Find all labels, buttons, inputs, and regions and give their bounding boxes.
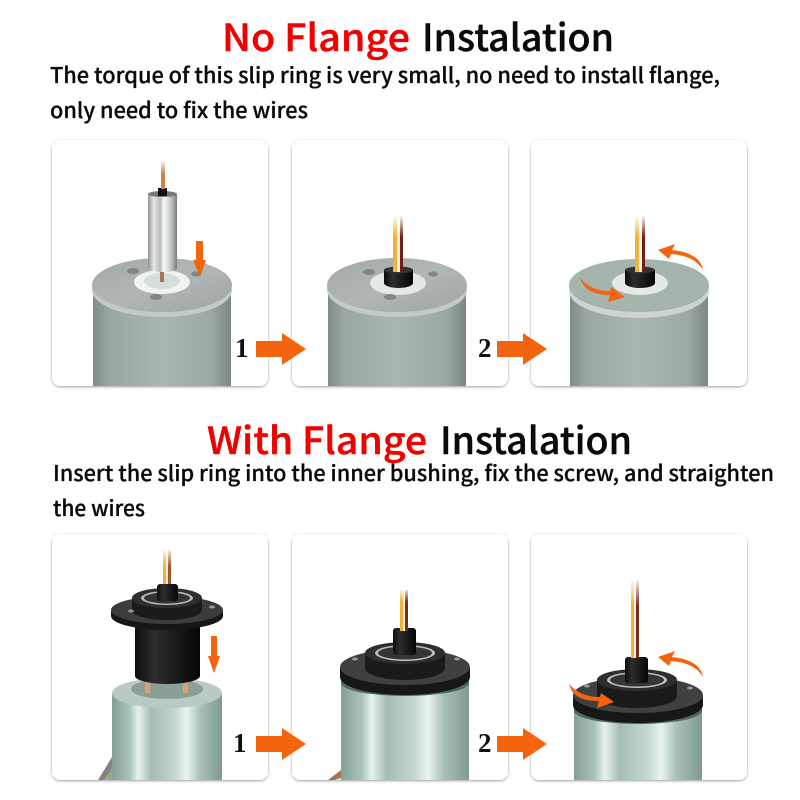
motor body <box>341 676 469 780</box>
panel: no flange step 1 <box>52 140 268 386</box>
colored motor wires <box>98 757 112 780</box>
slip ring and wires <box>384 215 413 288</box>
title: no flange installation <box>222 8 614 62</box>
text block: no flange description <box>50 59 720 125</box>
panel: no flange step 2 <box>292 140 508 386</box>
slip ring and wires <box>625 215 655 288</box>
icon: down arrow <box>193 241 206 277</box>
panel: no flange step 3 <box>531 140 747 386</box>
arrow: no flange step 1 to 2 <box>256 333 306 365</box>
icon: rotate arrow upper <box>658 244 703 270</box>
icon: down arrow <box>208 636 220 673</box>
panel: with flange step 1 <box>52 534 268 780</box>
step number 1: 1 <box>235 333 248 363</box>
title: with flange installation: Instalation <box>440 411 632 465</box>
motor body <box>327 258 467 386</box>
motor body <box>574 704 702 780</box>
panel: with flange step 3 <box>531 534 747 780</box>
icon: rotate arrow upper <box>658 651 703 677</box>
panel: with flange step 2 <box>292 534 508 780</box>
title: no flange installation: Instalation <box>422 8 614 62</box>
step number 1: 1 <box>233 728 246 758</box>
step number 2: 2 <box>478 728 492 758</box>
text block: no flange description: The torque of this slip ring is very small, no need to install flange, <box>50 59 720 90</box>
title: with flange installation <box>207 411 632 465</box>
motor body <box>112 678 222 780</box>
black flange slip ring <box>111 548 223 684</box>
title: no flange installation: No Flange <box>222 8 410 62</box>
step number 2: 2 <box>478 333 492 363</box>
brown motor wire <box>328 770 341 780</box>
icon: rotate arrow lower <box>580 278 625 302</box>
text block: no flange description: only need to fix the wires <box>50 94 308 125</box>
motor body <box>92 258 232 386</box>
black flange slip ring <box>340 588 470 695</box>
text block: with flange description: Insert the slip ring into the inner bushing, fix the screw, and straighten <box>53 457 774 488</box>
text block: with flange description <box>53 457 774 523</box>
icon: rotate arrow lower <box>569 684 614 708</box>
title: with flange installation: With Flange <box>207 411 427 465</box>
motor body <box>569 259 709 386</box>
arrow: no flange step 2 to 3 <box>497 333 547 365</box>
black flange slip ring <box>573 578 703 723</box>
arrow: with flange step 2 to 3 <box>497 728 547 760</box>
text block: with flange description: the wires <box>53 492 145 523</box>
silver slip ring <box>148 160 177 282</box>
arrow: with flange step 1 to 2 <box>256 728 306 760</box>
